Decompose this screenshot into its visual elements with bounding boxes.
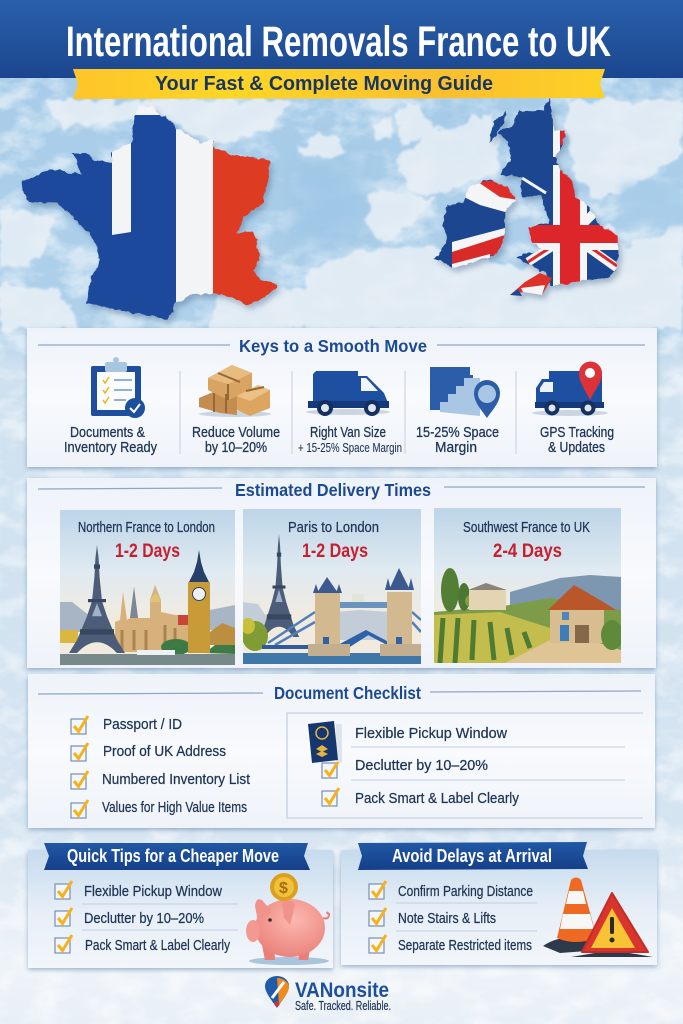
list: documents: [71, 716, 250, 818]
icon: GPS truck: [532, 362, 608, 416]
label: reduce volume: by 10–20%: [205, 439, 267, 456]
logo: VANonsite: VANonsite: [295, 979, 389, 1002]
ribbon: quick tips heading: Quick Tips for a Cheaper Move: [67, 846, 279, 866]
icon: van: [306, 371, 390, 416]
card: Southwest France to UK: [434, 508, 623, 663]
card: Northern France to London: [60, 510, 235, 665]
label: right van size: Right Van Size: [310, 424, 386, 441]
panel: estimated delivery times: [27, 478, 656, 668]
label: space margin: Margin: [435, 439, 477, 456]
map: UK and Ireland in Union Jack colours: [430, 95, 625, 296]
subtitle banner: Your Fast & Complete Moving Guide: [155, 73, 493, 95]
card: Northern France to London: Northern France to London: [78, 520, 215, 536]
icon: space margin: [430, 367, 500, 418]
label: reduce volume: [192, 424, 280, 456]
card: Northern France to London: 1-2 Days: [115, 541, 180, 562]
card: Paris to London: 1-2 Days: [302, 541, 368, 562]
logo: VANonsite: [265, 976, 391, 1013]
panel: quick tips: Declutter by 10–20%: [84, 911, 204, 927]
icon: piggy bank: $: [279, 880, 288, 897]
label: reduce volume: Reduce Volume: [192, 424, 280, 441]
icon: piggy bank: [246, 873, 329, 965]
list: documents: Passport / ID: [103, 717, 182, 733]
ribbon: quick tips heading: [44, 843, 310, 870]
label: GPS tracking: GPS Tracking: [540, 424, 614, 441]
heading: keys: Keys to a Smooth Move: [239, 336, 427, 356]
label: documents: Documents &: [70, 424, 145, 441]
label: GPS tracking: [540, 424, 614, 456]
ribbon: avoid delays heading: [358, 842, 588, 870]
box: right checklist: Pack Smart & Label Clearly: [355, 791, 520, 807]
label: documents: [64, 424, 157, 456]
label: right van size: [298, 424, 402, 455]
list: documents: Numbered Inventory List: [102, 772, 250, 788]
icon: traffic cone: [543, 878, 600, 953]
label: GPS tracking: & Updates: [548, 439, 605, 456]
card: Paris to London: Paris to London: [288, 520, 379, 536]
icon: passport: [308, 721, 342, 763]
icon: warning triangle: [571, 893, 653, 957]
card: Southwest France to UK: Southwest France to UK: [463, 520, 590, 536]
panel: avoid delays: Confirm Parking Distance: [398, 884, 533, 900]
label: right van size: + 15-25% Space Margin: [298, 440, 402, 455]
label: documents: Inventory Ready: [64, 439, 157, 456]
panel: avoid delays: [341, 842, 657, 965]
panel: quick tips: [28, 843, 333, 968]
list: documents: Values for High Value Items: [102, 800, 247, 816]
icon: clipboard checklist: [91, 357, 145, 418]
ribbon: avoid delays heading: Avoid Delays at Arrival: [392, 846, 552, 866]
logo: VANonsite: Safe. Tracked. Reliable.: [295, 999, 391, 1013]
card: Southwest France to UK: 2-4 Days: [493, 541, 562, 562]
label: space margin: [416, 424, 499, 456]
panel: avoid delays: Separate Restricted items: [398, 938, 532, 954]
heading: delivery: Estimated Delivery Times: [235, 480, 431, 500]
panel: avoid delays: Note Stairs & Lifts: [398, 911, 496, 927]
icon: cardboard boxes: [199, 365, 271, 417]
list: documents: Proof of UK Address: [103, 744, 226, 760]
panel: quick tips: Pack Smart & Label Clearly: [85, 938, 231, 954]
panel: document checklist: [28, 674, 655, 828]
panel: quick tips: Flexible Pickup Window: [84, 884, 222, 900]
header band: [0, 0, 683, 78]
box: right checklist: Declutter by 10–20%: [355, 758, 488, 774]
box: right checklist: Flexible Pickup Window: [355, 726, 508, 742]
map: France in flag colours: [15, 100, 283, 325]
subtitle banner: [73, 69, 605, 99]
heading: checklist: Document Checklist: [274, 683, 421, 703]
label: space margin: 15-25% Space: [416, 424, 499, 441]
box: right checklist: [287, 713, 643, 818]
panel: keys to a smooth move: [27, 328, 657, 467]
card: Paris to London: [241, 509, 421, 664]
